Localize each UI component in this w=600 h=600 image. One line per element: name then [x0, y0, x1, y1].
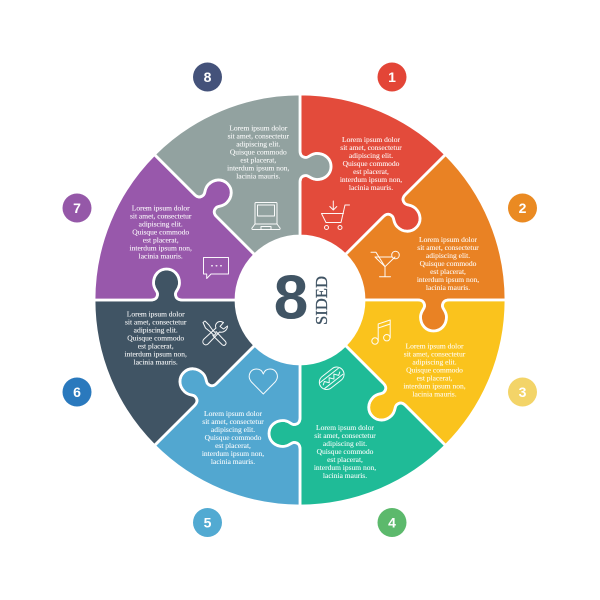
number badge 1: [378, 62, 406, 92]
text: segment 6: lacinia mauris.: [134, 358, 178, 366]
text: segment 4: Quisque commodo: [317, 447, 374, 456]
panel: segment 6 dark slate: [51, 229, 268, 446]
text: segment 8: interdum ipsum non,: [227, 164, 290, 172]
text: segment 6: Lorem ipsum dolor: [127, 310, 185, 318]
number badge 5: 5: [204, 514, 212, 530]
text: segment 3: sit amet, consectetur: [404, 350, 466, 358]
text: segment 7: est placerat,: [143, 236, 179, 244]
text: segment 4: est placerat,: [327, 455, 363, 464]
center numeral 8: 8: [274, 264, 308, 332]
text: segment 1: est placerat,: [353, 167, 389, 176]
number badge 2: 2: [519, 200, 527, 216]
text: segment 8: Quisque commodo: [230, 148, 287, 156]
text: segment 5: interdum ipsum non,: [202, 449, 264, 458]
text: segment 5: adipiscing elit.: [211, 425, 255, 434]
text: segment 5: lacinia mauris.: [211, 457, 255, 466]
panel: segment 1 red: [300, 94, 446, 255]
text: segment 1: Quisque commodo: [343, 159, 400, 168]
number badge 7: [62, 194, 92, 222]
number badge 1: 1: [388, 69, 396, 85]
text: segment 3: interdum ipsum non,: [403, 382, 466, 390]
text: segment 5: sit amet, consectetur: [202, 417, 264, 426]
text: segment 2: sit amet, consectetur: [417, 243, 479, 252]
text: segment 7: sit amet, consectetur: [130, 212, 192, 220]
text: segment 8: lacinia mauris.: [236, 172, 280, 180]
center label SIDED: SIDED: [312, 276, 331, 325]
text: segment 2: interdum ipsum non,: [417, 275, 479, 284]
number badge 6: 6: [73, 384, 81, 400]
text: segment 7: adipiscing elit.: [139, 220, 183, 228]
panel: segment 4 teal: [229, 332, 446, 549]
icon: music notes: [372, 320, 390, 344]
text: segment 7: Lorem ipsum dolor: [132, 204, 190, 212]
text: segment 6: est placerat,: [138, 342, 174, 350]
panel: segment 7 purple: [94, 154, 255, 300]
icon: hot dog: [316, 364, 347, 392]
text: segment 4: adipiscing elit.: [323, 439, 367, 448]
panel: segment 5 blue: [154, 345, 300, 506]
text: segment 2: adipiscing elit.: [426, 251, 470, 260]
text: segment 6: interdum ipsum non,: [125, 350, 187, 358]
text: segment 1: adipiscing elit.: [349, 151, 393, 160]
text: segment 2: est placerat,: [430, 267, 466, 276]
text: segment 5: Quisque commodo: [205, 433, 262, 442]
text: segment 1: interdum ipsum non,: [340, 175, 402, 184]
icon: laptop: [252, 202, 280, 230]
number badge 6: [62, 378, 92, 406]
text: segment 3: Lorem ipsum dolor: [406, 342, 464, 350]
number badge 4: 4: [388, 514, 396, 530]
text: segment 1: sit amet, consectetur: [340, 143, 402, 152]
text: segment 2: lacinia mauris.: [426, 283, 470, 292]
text: segment 3: Quisque commodo: [406, 366, 463, 374]
text: segment 4: interdum ipsum non,: [314, 463, 376, 472]
text: segment 6: sit amet, consectetur: [125, 318, 187, 326]
text: segment 4: sit amet, consectetur: [314, 431, 376, 440]
icon: cocktail glass: [371, 251, 399, 277]
panel: segment 3 yellow: [345, 300, 506, 446]
number badge 3: [508, 378, 537, 406]
text: segment 4: Lorem ipsum dolor: [316, 423, 374, 432]
icon: wrench and screwdriver: [203, 321, 228, 345]
center circle: [235, 235, 365, 365]
number badge 5: [193, 508, 222, 537]
text: segment 8: sit amet, consectetur: [228, 132, 290, 140]
panel: segment 2 orange: [332, 154, 549, 371]
icon: shopping cart: [322, 201, 350, 230]
text: segment 1: Lorem ipsum dolor: [342, 135, 400, 144]
text: segment 7: lacinia mauris.: [139, 252, 183, 260]
number badge 4: [378, 508, 406, 537]
text: segment 2: Quisque commodo: [420, 259, 477, 268]
text: segment 7: interdum ipsum non,: [130, 244, 192, 252]
text: segment 8: est placerat,: [240, 156, 276, 164]
number badge 3: 3: [519, 384, 527, 400]
text: segment 8: adipiscing elit.: [236, 140, 280, 148]
number badge 7: 7: [73, 200, 81, 216]
number badge 8: [193, 62, 222, 92]
number badge 2: [508, 194, 537, 222]
text: segment 8: Lorem ipsum dolor: [229, 124, 288, 132]
text: segment 7: Quisque commodo: [132, 228, 189, 236]
text: segment 2: Lorem ipsum dolor: [419, 235, 477, 244]
text: segment 5: Lorem ipsum dolor: [204, 409, 262, 418]
text: segment 4: lacinia mauris.: [323, 471, 367, 480]
text: segment 3: lacinia mauris.: [412, 390, 457, 398]
text: segment 5: est placerat,: [215, 441, 251, 450]
text: segment 6: adipiscing elit.: [134, 326, 178, 334]
panel: segment 8 gray: [154, 51, 371, 268]
number badge 8: 8: [204, 69, 212, 85]
text: segment 3: adipiscing elit.: [412, 358, 457, 366]
icon: heart: [249, 369, 277, 394]
icon: speech bubble: [204, 258, 228, 278]
text: segment 6: Quisque commodo: [127, 334, 184, 342]
text: segment 1: lacinia mauris.: [349, 183, 393, 192]
text: segment 3: est placerat,: [417, 374, 453, 382]
